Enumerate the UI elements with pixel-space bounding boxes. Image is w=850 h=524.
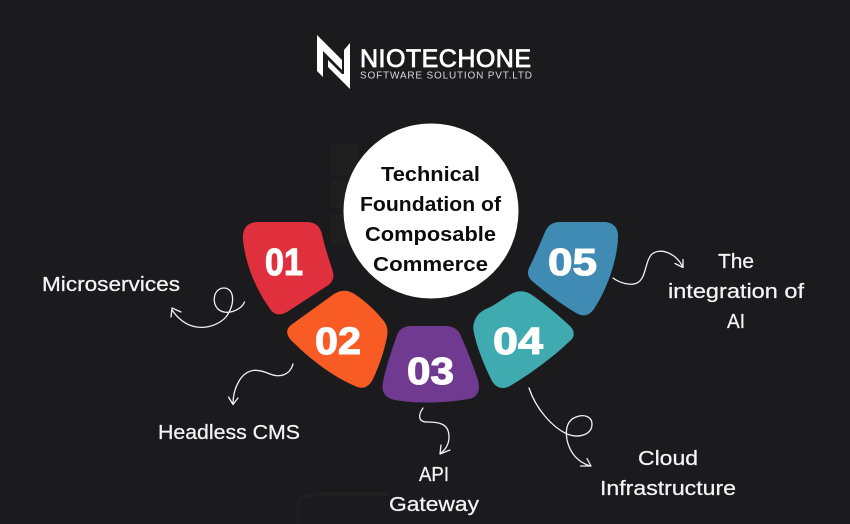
label: API Gateway bbox=[389, 464, 479, 516]
label: The integration of AI: The bbox=[718, 251, 754, 273]
arrow to The integration of AI bbox=[613, 251, 683, 284]
step 02: 02 bbox=[315, 321, 361, 363]
label: The integration of AI bbox=[668, 251, 805, 333]
label: The integration of AI: integration of bbox=[668, 281, 805, 303]
logo: Niotechone bbox=[317, 35, 532, 89]
center circle with title bbox=[344, 124, 518, 298]
title: Commerce bbox=[373, 254, 488, 276]
label: The integration of AI: AI bbox=[727, 311, 745, 333]
step 02 bbox=[287, 291, 388, 388]
step 03: 03 bbox=[407, 351, 454, 393]
step 01: 01 bbox=[265, 242, 303, 284]
arrow to Cloud Infrastructure bbox=[529, 388, 592, 466]
label: API Gateway: Gateway bbox=[389, 494, 479, 516]
arrow to API Gateway bbox=[420, 408, 450, 454]
label: API Gateway: API bbox=[419, 464, 449, 486]
label: Cloud Infrastructure bbox=[600, 448, 736, 500]
arrow to Microservices bbox=[171, 288, 244, 327]
title: Foundation of bbox=[360, 194, 501, 216]
label: Headless CMS: Headless CMS bbox=[158, 422, 300, 444]
step 03 bbox=[382, 326, 479, 403]
step 04: 04 bbox=[493, 321, 543, 363]
label: Microservices: Microservices bbox=[42, 274, 180, 296]
step 01 bbox=[243, 222, 333, 314]
logo wordmark: NIOTECHONE bbox=[360, 45, 531, 73]
step 05 bbox=[528, 222, 618, 315]
title: Technical bbox=[381, 164, 480, 186]
step 04 bbox=[473, 291, 574, 388]
label: Cloud Infrastructure: Infrastructure bbox=[600, 478, 736, 500]
icon: N mark bbox=[317, 35, 350, 89]
title: Composable bbox=[365, 224, 496, 246]
title bbox=[360, 164, 501, 276]
label: Cloud Infrastructure: Cloud bbox=[638, 448, 698, 470]
arrow to Headless CMS bbox=[228, 364, 293, 404]
step 05: 05 bbox=[548, 242, 597, 284]
logo tagline: SOFTWARE SOLUTION PVT.LTD bbox=[360, 70, 532, 82]
